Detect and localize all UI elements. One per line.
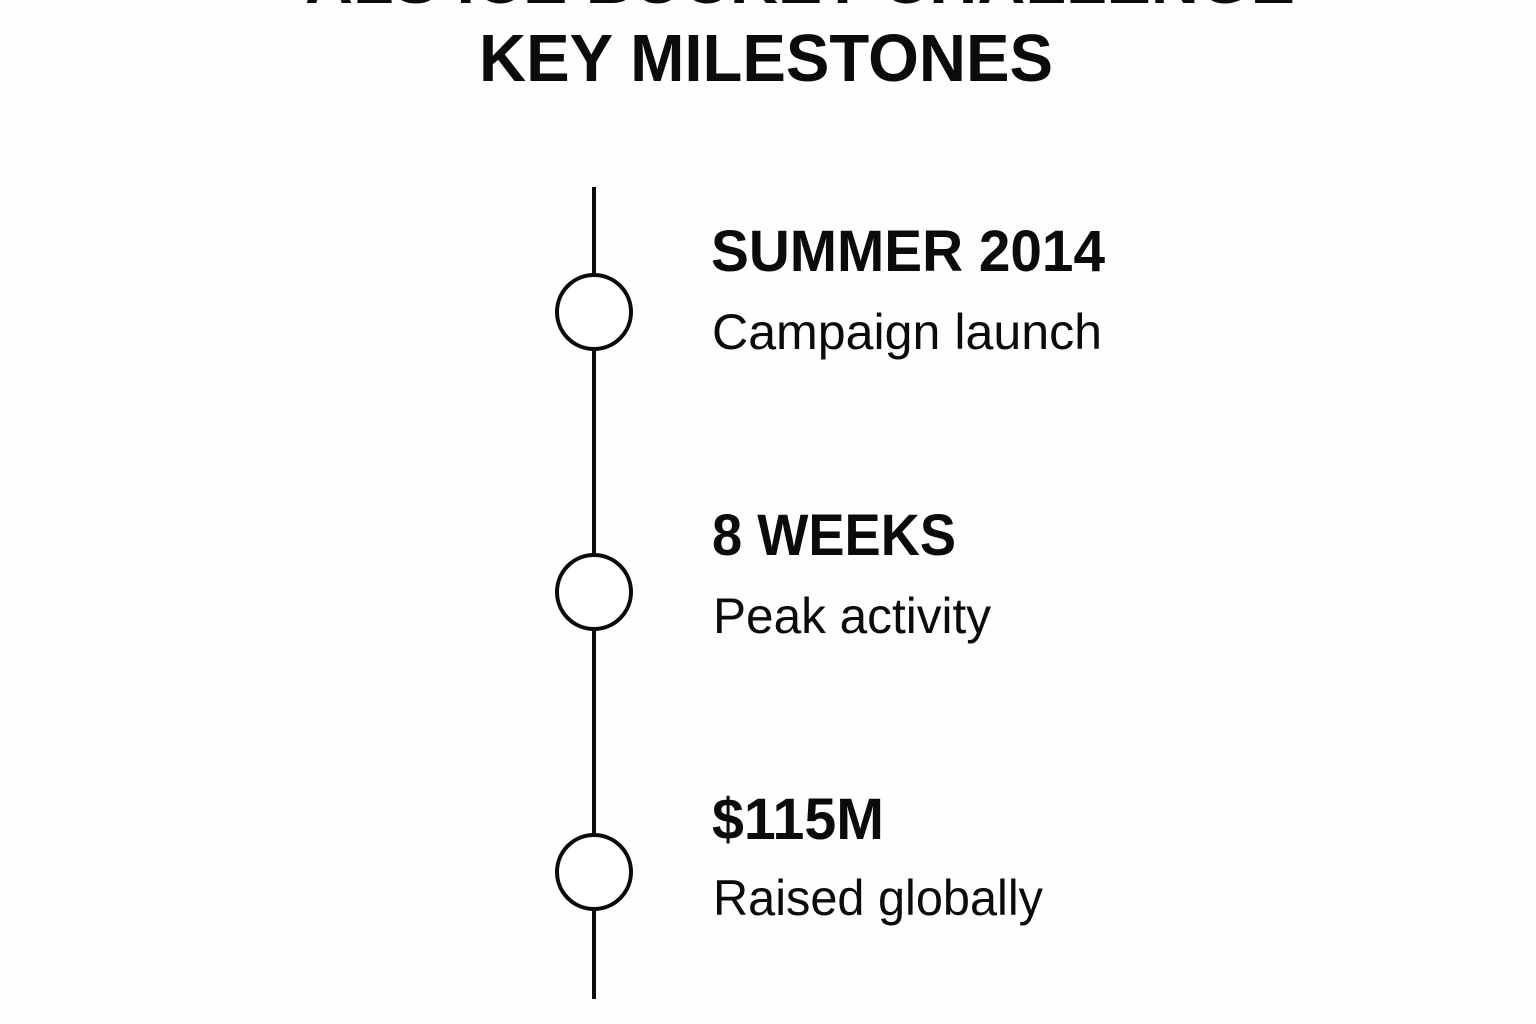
milestone: summer 2014 — [711, 219, 1105, 360]
timeline — [557, 187, 631, 999]
milestone: 8 weeks — [712, 503, 991, 644]
timeline vertical line — [592, 187, 596, 999]
milestone heading: $115M — [712, 787, 884, 852]
title: key milestones: KEY MILESTONES — [479, 21, 1053, 96]
milestone heading: 8 WEEKS — [712, 503, 956, 568]
marker: 8 weeks — [557, 555, 631, 629]
milestone heading: SUMMER 2014 — [711, 219, 1105, 284]
marker: $115M — [557, 835, 631, 909]
milestone description: Campaign launch — [712, 304, 1102, 360]
milestone description: Peak activity — [713, 588, 991, 644]
milestone: $115M raised — [712, 787, 1043, 926]
milestone description: Raised globally — [713, 870, 1043, 926]
marker: summer 2014 — [557, 275, 631, 349]
